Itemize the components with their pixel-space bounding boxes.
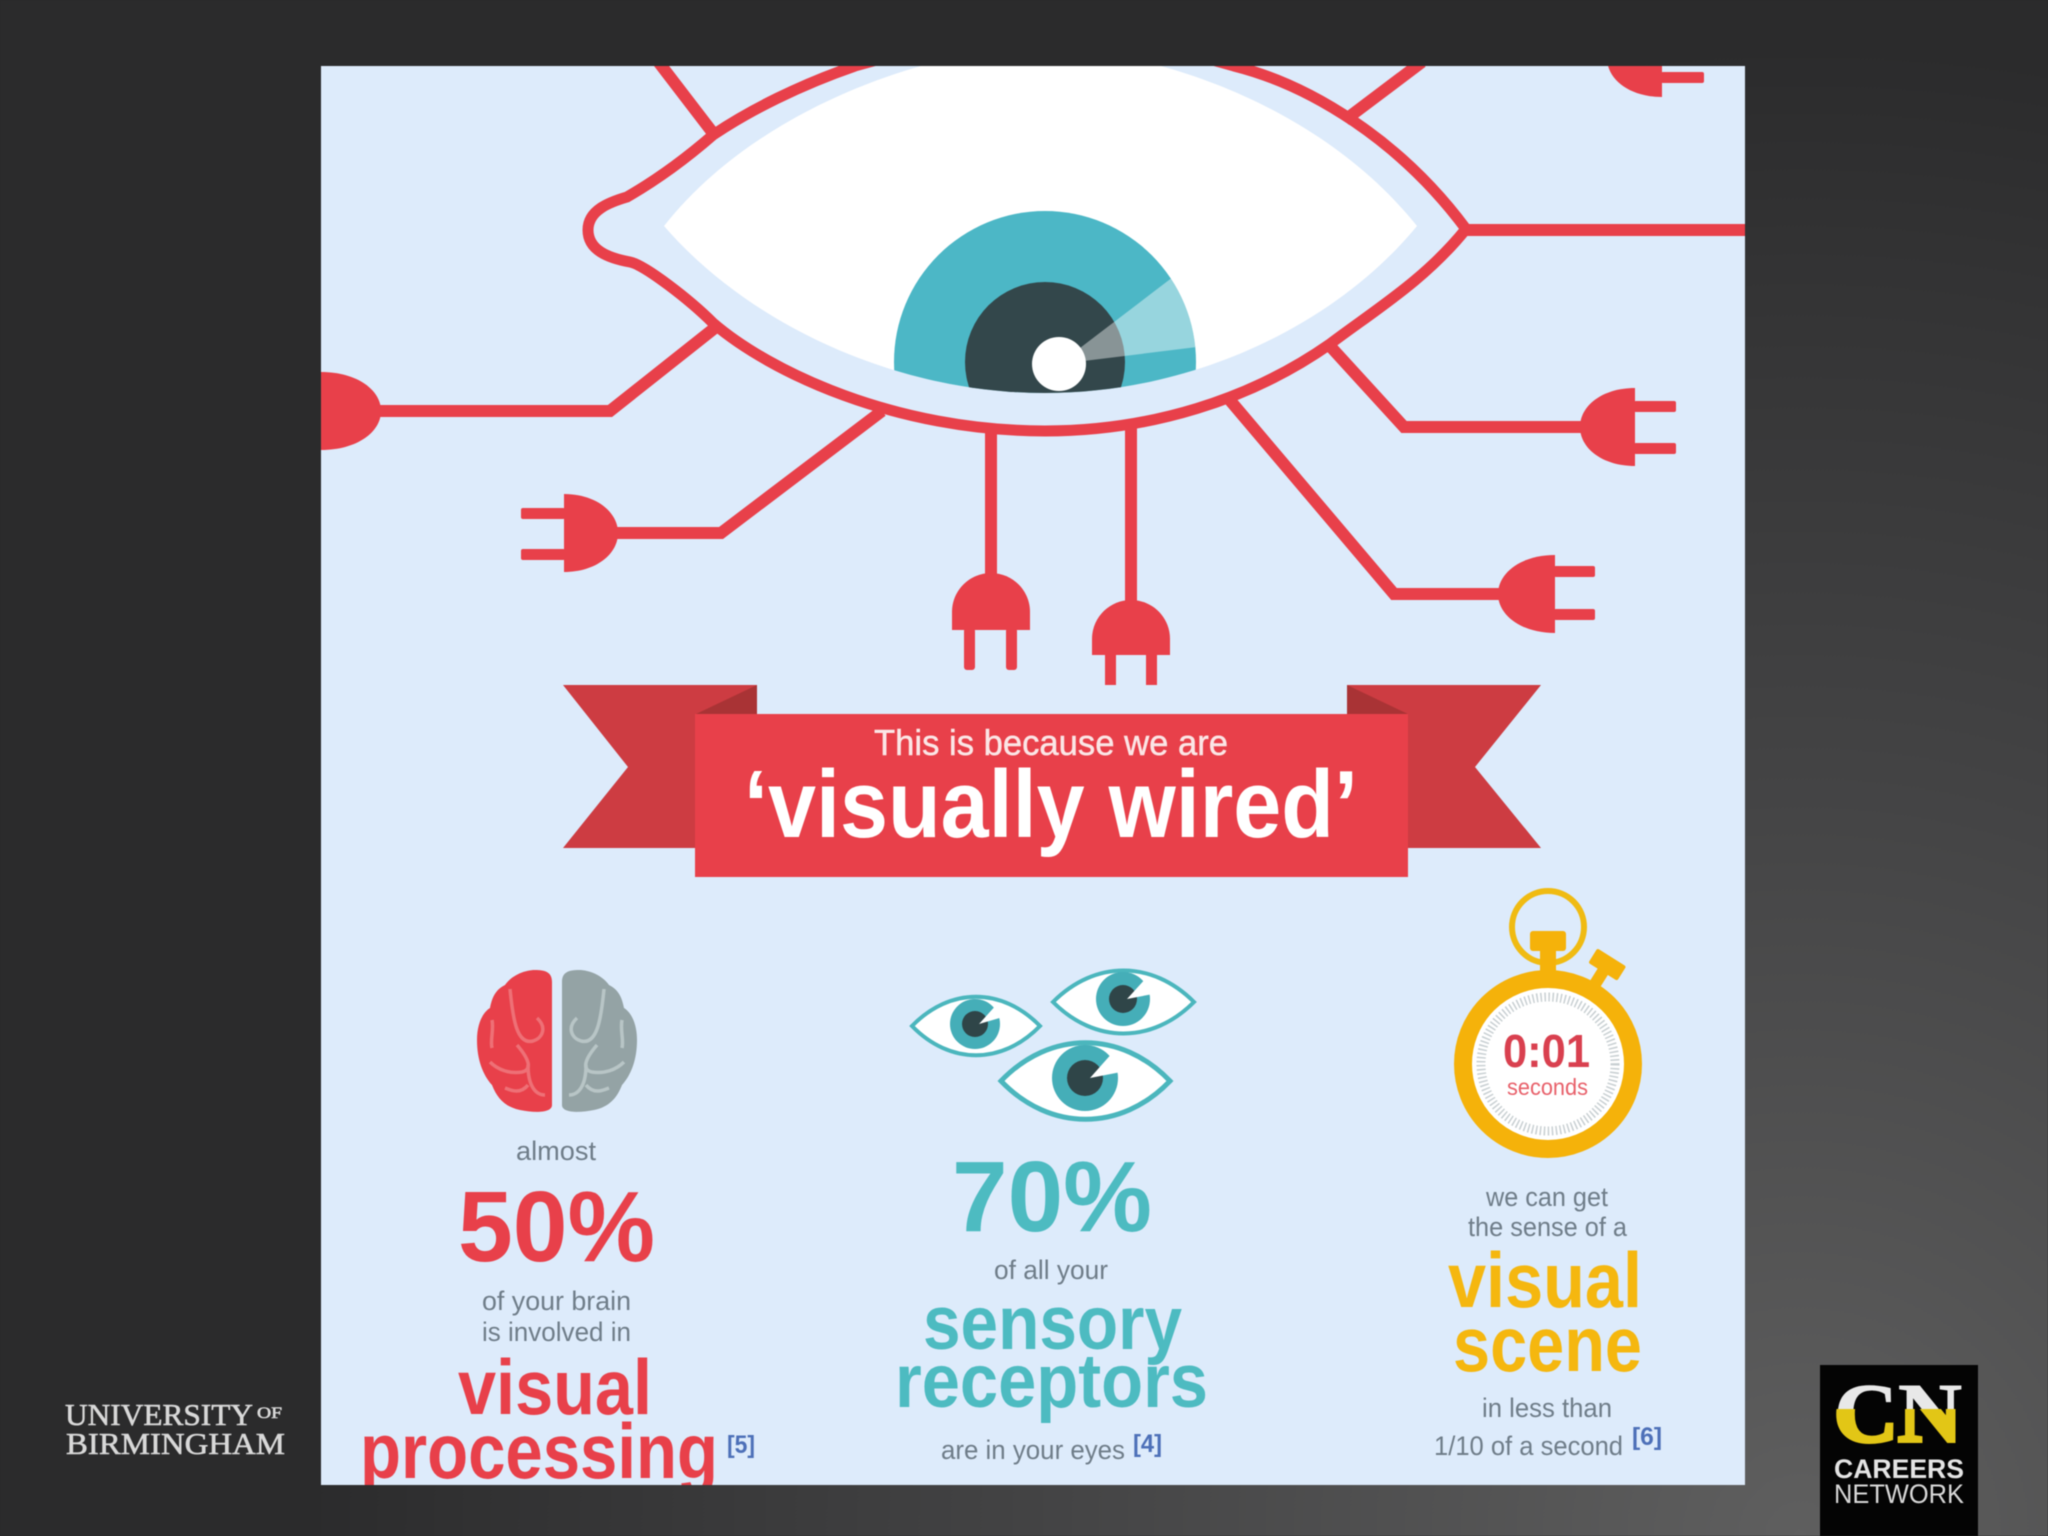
- stat: 50%: 50%: [458, 1171, 655, 1283]
- text: are in your eyes: are in your eyes: [941, 1435, 1125, 1465]
- text: 1/10 of a second: 1/10 of a second: [1434, 1431, 1623, 1461]
- text: in less than: in less than: [1482, 1393, 1612, 1423]
- ribbon fold left: [696, 685, 757, 714]
- ribbon subtitle: This is because we are: [874, 722, 1228, 763]
- wire: top right: [1345, 62, 1422, 120]
- heading: processing: processing: [360, 1407, 718, 1495]
- column: eyes statistic: [895, 970, 1208, 1465]
- icon: brain: [477, 970, 637, 1112]
- heading: scene: scene: [1453, 1300, 1642, 1388]
- plug: lower left: [521, 411, 882, 572]
- ribbon left tail: [563, 685, 757, 848]
- stat: 70%: 70%: [952, 1141, 1152, 1253]
- logo: Careers Network: CN: [1834, 1367, 1962, 1460]
- heading: receptors: receptors: [895, 1339, 1208, 1424]
- logo: Careers Network: [1820, 1365, 1978, 1536]
- ribbon right tail: [1347, 685, 1541, 848]
- logo: University of Birmingham: OF: [257, 1405, 282, 1422]
- panel: infographic: [321, 19, 1745, 1495]
- text: the sense of a: the sense of a: [1468, 1212, 1628, 1242]
- logo: University of Birmingham: UNIVERSITY: [65, 1397, 253, 1432]
- plug: bottom left: [952, 428, 1030, 670]
- logo: Careers Network: NETWORK: [1834, 1479, 1964, 1509]
- icon: large eye: [582, 65, 1470, 438]
- heading: visual: visual: [1448, 1236, 1642, 1324]
- ribbon banner: [563, 685, 1541, 877]
- plug: lower right: [1228, 398, 1595, 633]
- icon: three eyes: [912, 970, 1194, 1119]
- wire: top left: [657, 60, 716, 137]
- reference 5: [5]: [727, 1431, 755, 1459]
- eye outline: [588, 30, 1466, 431]
- plug: top right: [1608, 65, 1705, 98]
- reference 4: [4]: [1133, 1430, 1162, 1458]
- stopwatch unit: seconds: [1507, 1074, 1588, 1100]
- plug: far left: [321, 327, 716, 450]
- plug: upper right: [1330, 346, 1676, 466]
- column: brain statistic: [360, 970, 755, 1495]
- iris and pupil: [893, 210, 1197, 394]
- ribbon body: [695, 714, 1408, 877]
- wire: right: [1466, 224, 1745, 236]
- logo: University of Birmingham: BIRMINGHAM: [66, 1426, 285, 1461]
- text: almost: almost: [516, 1136, 596, 1166]
- text: of your brain: of your brain: [482, 1286, 631, 1316]
- text: of all your: of all your: [994, 1255, 1108, 1285]
- small eye top right: [1053, 970, 1194, 1034]
- ribbon fold right: [1347, 685, 1408, 714]
- large eye bottom: [1001, 1043, 1170, 1119]
- reference 6: [6]: [1632, 1423, 1662, 1451]
- text: we can get: we can get: [1485, 1182, 1608, 1212]
- logo: Careers Network: CN: [1834, 1367, 1962, 1460]
- icon: stopwatch: [1463, 891, 1633, 1149]
- small eye left: [912, 997, 1040, 1055]
- logo: University of Birmingham: [65, 1397, 285, 1461]
- stopwatch time: 0:01: [1503, 1025, 1590, 1077]
- eye white: [664, 60, 1417, 393]
- column: stopwatch statistic: [1434, 891, 1662, 1461]
- logo: Careers Network: CAREERS: [1834, 1454, 1964, 1484]
- plug: bottom right: [1092, 424, 1170, 685]
- ribbon title: ‘visually wired’: [744, 751, 1358, 858]
- wires and plugs: [321, 19, 1745, 685]
- heading: sensory: sensory: [923, 1281, 1182, 1366]
- heading: visual: visual: [458, 1343, 652, 1431]
- text: is involved in: is involved in: [482, 1317, 631, 1347]
